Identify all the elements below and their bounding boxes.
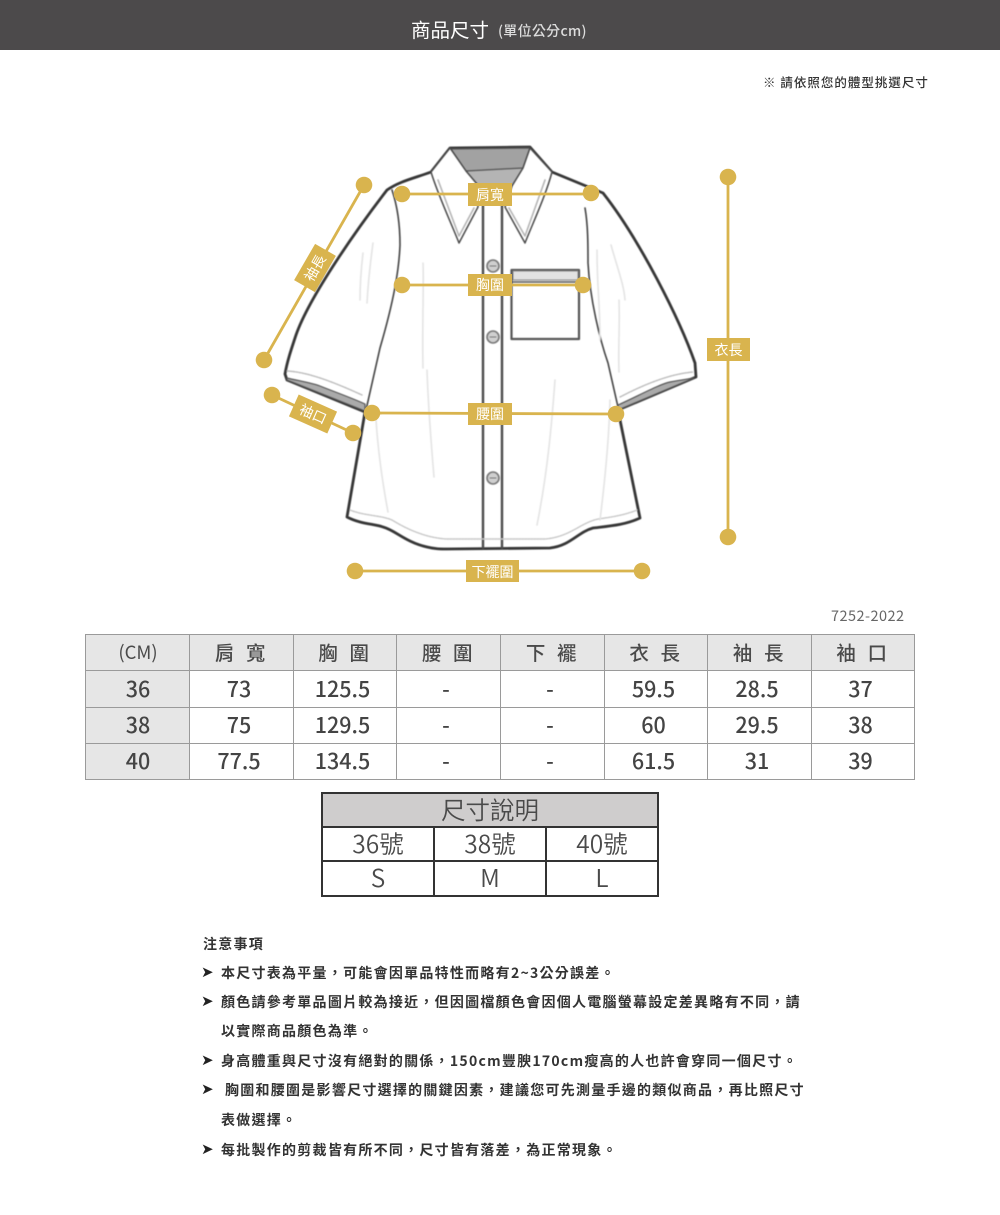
size measurement table: 125.5 <box>315 673 370 704</box>
measure: garment length: 衣長 <box>714 340 742 360</box>
notes section: ➤ <box>201 963 215 981</box>
size measurement table: 袖 長 <box>733 637 787 666</box>
measure: garment length <box>707 169 750 545</box>
size measurement table: 134.5 <box>315 745 370 776</box>
top note: choose by body shape: ※ 請依照您的體型挑選尺寸 <box>763 72 929 91</box>
size measurement table: 61.5 <box>632 745 675 776</box>
size legend table: 36號 <box>352 826 404 861</box>
notes section: ➤ <box>201 1051 215 1069</box>
size measurement table: 衣 長 <box>629 637 684 666</box>
size measurement table: 31 <box>745 745 769 776</box>
size measurement table: 129.5 <box>315 709 370 740</box>
notes section: ➤ <box>201 1140 215 1158</box>
shirt drawing <box>285 147 696 549</box>
size measurement table: - <box>546 673 554 704</box>
size measurement table: 29.5 <box>735 709 779 740</box>
measure: shoulder width <box>394 183 599 206</box>
size measurement table: 38 <box>126 709 150 740</box>
note 2: 顏色請參考單品圖片較為接近，但因圖檔顏色會因個人電腦螢幕設定差異略有不同，請 <box>221 992 801 1012</box>
size measurement table: 77.5 <box>217 745 261 776</box>
measure: chest: 胸圍 <box>476 275 504 295</box>
notes section: ➤ <box>201 1080 215 1098</box>
chest pocket <box>512 270 579 339</box>
note 4 continued: 表做選擇。 <box>221 1110 297 1130</box>
size measurement table: 59.5 <box>632 673 675 704</box>
size measurement table <box>85 634 915 780</box>
size measurement table: 73 <box>227 673 251 704</box>
fabric folds <box>360 243 625 525</box>
size legend table: L <box>595 860 609 895</box>
size legend table: S <box>371 860 385 895</box>
note 4: 胸圍和腰圍是影響尺寸選擇的關鍵因素，建議您可先測量手邊的類似商品，再比照尺寸 <box>225 1080 805 1100</box>
size measurement table: - <box>546 745 554 776</box>
note 3: 身高體重與尺寸沒有絕對的關係，150cm豐腴170cm瘦高的人也許會穿同一個尺寸。 <box>221 1051 798 1071</box>
size measurement table: 60 <box>641 709 666 740</box>
shirt diagram <box>256 144 750 582</box>
size legend table: 40號 <box>576 826 628 861</box>
measure: sleeve length: 袖長 <box>299 251 331 285</box>
measure: hem: 下襬圍 <box>472 562 514 582</box>
collar flaps <box>431 148 552 243</box>
heading: product size: 商品尺寸 <box>411 14 489 43</box>
note 1: 本尺寸表為平量，可能會因單品特性而略有2~3公分誤差。 <box>221 963 616 983</box>
measure: waist <box>364 403 624 425</box>
measure: cuff <box>264 387 361 441</box>
size measurement table: - <box>546 709 554 740</box>
notes title: 注意事項 <box>203 934 264 954</box>
size measurement table: - <box>442 709 450 740</box>
size measurement table: 28.5 <box>735 673 779 704</box>
size measurement table: 40 <box>126 745 150 776</box>
measure: chest <box>394 274 591 296</box>
measure: shoulder width: 肩寬 <box>476 185 504 205</box>
shirt body outline <box>285 147 696 549</box>
measure: hem <box>347 560 650 582</box>
measure: sleeve length <box>256 177 372 368</box>
size measurement table: 下 襬 <box>526 637 580 666</box>
size legend table: 尺寸說明 <box>441 792 539 827</box>
measure: cuff: 袖口 <box>296 399 330 429</box>
back neck lining <box>451 148 530 194</box>
size measurement table: 胸 圍 <box>318 637 373 666</box>
measure: waist: 腰圍 <box>476 404 504 424</box>
size measurement table: - <box>442 673 450 704</box>
note 2 continued: 以實際商品顏色為準。 <box>221 1021 374 1041</box>
hem stitching <box>350 510 637 539</box>
placket lines <box>483 206 502 548</box>
armhole seams <box>366 190 618 410</box>
size legend table: 38號 <box>464 826 516 861</box>
heading unit note: (單位公分cm) <box>498 21 587 41</box>
size legend table <box>321 792 659 897</box>
size measurement table: - <box>442 745 450 776</box>
size measurement table: 38 <box>848 709 873 740</box>
size measurement table: 37 <box>848 673 873 704</box>
note 5: 每批製作的剪裁皆有所不同，尺寸皆有落差，為正常現象。 <box>221 1140 618 1160</box>
size measurement table: (CM) <box>118 639 158 665</box>
notes section: ➤ <box>201 992 215 1010</box>
notes section <box>201 934 805 1160</box>
size measurement table: 肩 寬 <box>215 637 269 666</box>
header bar <box>0 0 1000 50</box>
size measurement table: 腰 圍 <box>422 637 476 666</box>
size legend table: M <box>480 860 500 895</box>
product code: 7252-2022 <box>831 605 904 626</box>
back neck upper band <box>451 148 530 171</box>
shirt buttons <box>487 260 499 484</box>
size measurement table: 袖 口 <box>836 637 891 666</box>
size measurement table: 36 <box>126 673 150 704</box>
sleeve cuffs <box>287 371 694 411</box>
size measurement table: 75 <box>227 709 251 740</box>
size measurement table: 39 <box>848 745 873 776</box>
